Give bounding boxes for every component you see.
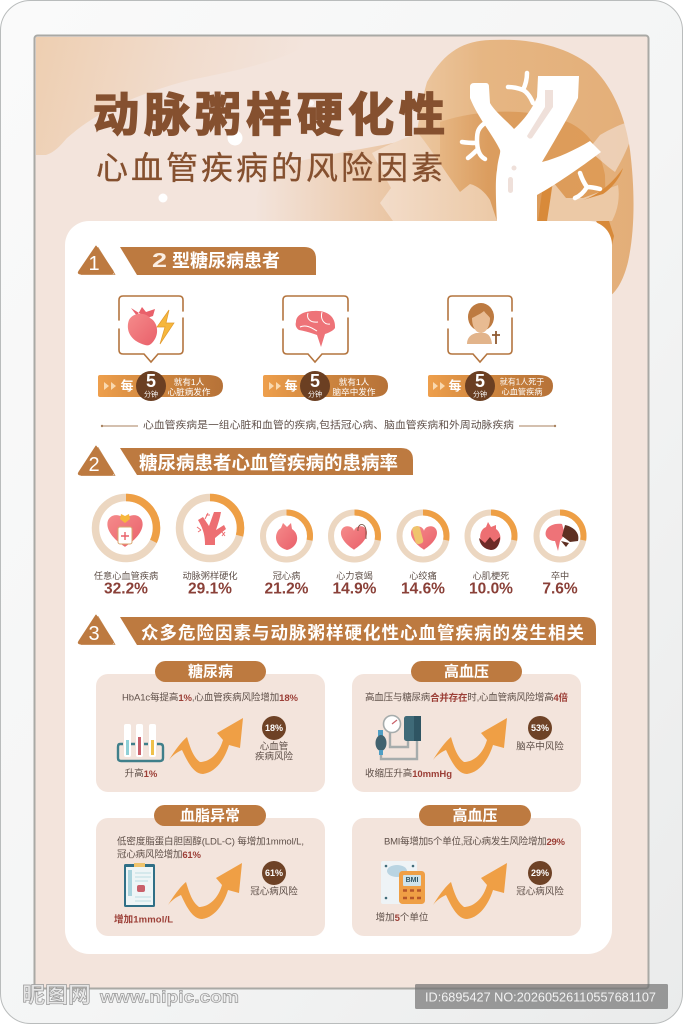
icon: heart bbox=[276, 523, 297, 550]
text: combined risk statement: 高血压与糖尿病合并存在时,心血管病风险增高4倍 bbox=[365, 692, 568, 704]
watermark: site logo bbox=[22, 982, 239, 1008]
panel: dyslipidemia bbox=[96, 805, 325, 936]
label: rise 1%: 升高1% bbox=[125, 768, 158, 780]
title: 动脉粥样硬化性 bbox=[93, 89, 445, 141]
icon: brain bbox=[296, 311, 335, 347]
pill: heart attack every 5 minutes: 心脏病发作 bbox=[168, 386, 211, 397]
icon: artery bbox=[197, 512, 226, 545]
label: increase 1 mmol/L: 增加1mmol/L bbox=[114, 914, 173, 926]
donut: atherosclerosis 29.1% bbox=[180, 498, 240, 598]
donut: stroke 7.6%: 卒中 bbox=[551, 570, 569, 581]
pill: heart attack every 5 minutes bbox=[98, 371, 223, 401]
pill heading: hypertension bbox=[411, 661, 522, 682]
donut: stroke 7.6% bbox=[536, 512, 584, 598]
arrow bbox=[433, 718, 507, 774]
label: increase 5 units: 增加5个单位 bbox=[376, 912, 429, 924]
pill heading: diabetes bbox=[155, 661, 266, 682]
badge: 18%: 18% bbox=[265, 723, 283, 733]
donut: any CVD 32.2% bbox=[94, 498, 158, 598]
label: stroke risk: 脑卒中风险 bbox=[516, 740, 564, 752]
donut: myocardial infarction 10.0%: 10.0% bbox=[469, 580, 513, 598]
pill: heart attack every 5 minutes: 5 bbox=[146, 371, 156, 391]
pill: death every 5 minutes: 5 bbox=[475, 371, 485, 391]
text: HbA1c statement: HbA1c每提高1%,心血管疾病风险增加18% bbox=[122, 692, 299, 704]
arrow bbox=[169, 718, 243, 774]
pill: stroke every 5 minutes: 脑卒中发作 bbox=[333, 386, 376, 397]
section 3 heading bbox=[78, 615, 596, 645]
pill: heart attack every 5 minutes: 每 bbox=[120, 378, 134, 394]
donut: angina 14.6% bbox=[400, 512, 446, 598]
decorative background shapes bbox=[36, 37, 637, 296]
panel: hypertension bbox=[352, 661, 581, 792]
label: systolic rise: 收缩压升高10mmHg bbox=[365, 768, 452, 780]
pill: stroke every 5 minutes: 每 bbox=[284, 378, 298, 394]
icon: clipboard bbox=[124, 863, 155, 907]
watermark: image ID bar: ID:6895427 NO:20260526110557681107 bbox=[425, 990, 656, 1004]
pill heading: hypertension: 高血压 bbox=[444, 662, 489, 680]
pill: death every 5 minutes: 心血管疾病 bbox=[502, 386, 542, 396]
watermark: image ID bar bbox=[415, 984, 668, 1009]
subtitle: 心血管疾病的风险因素 bbox=[96, 150, 443, 186]
section 2 heading bbox=[78, 446, 413, 476]
callout: heart attack bbox=[119, 296, 183, 362]
icon: damaged brain bbox=[546, 524, 578, 551]
arrow bbox=[433, 863, 507, 919]
donut: heart failure 14.9%: 14.9% bbox=[333, 580, 377, 598]
text: BMI statement: BMI每增加5个单位,冠心病发生风险增加29% bbox=[384, 836, 566, 848]
pill: death every 5 minutes: 分钟 bbox=[473, 390, 487, 398]
pill: heart attack every 5 minutes: 分钟 bbox=[144, 390, 158, 398]
icon: BMI calculator bbox=[381, 861, 425, 904]
text: LDL-C statement bbox=[117, 836, 304, 860]
badge: 18% bbox=[262, 716, 286, 740]
donut: myocardial infarction 10.0%: 心肌梗死 bbox=[473, 570, 509, 581]
donut: coronary heart disease 21.2%: 冠心病 bbox=[273, 570, 300, 581]
label: CHD risk: 冠心病风险 bbox=[250, 886, 298, 898]
panel: diabetes bbox=[96, 661, 325, 792]
donut: heart failure 14.9% bbox=[331, 512, 378, 598]
pill heading: BMI panel: 高血压 bbox=[452, 806, 498, 824]
section 1 heading bbox=[78, 246, 316, 275]
pill heading: diabetes: 糖尿病 bbox=[188, 662, 233, 680]
section 3 heading: 3 bbox=[88, 623, 100, 645]
badge: 61%: 61% bbox=[265, 868, 283, 878]
icon: BMI calculator: BMI bbox=[406, 877, 418, 884]
label: CVD risk: 疾病风险 bbox=[255, 750, 293, 762]
pill heading: dyslipidemia: 血脂异常 bbox=[180, 806, 240, 824]
callout: death bbox=[448, 296, 512, 362]
donut: stroke 7.6%: 7.6% bbox=[542, 580, 578, 598]
definition text line: 心血管疾病是一组心脏和血管的疾病,包括冠心病、脑血管疾病和外周动脉疾病 bbox=[143, 418, 514, 432]
icon: infarcted heart bbox=[479, 522, 500, 550]
section 2 heading: 2 bbox=[88, 454, 100, 476]
text: LDL-C statement: 低密度脂蛋白胆固醇(LDL-C) 每增加1mmol/L, bbox=[117, 836, 304, 848]
white content card bbox=[65, 221, 612, 954]
pill: stroke every 5 minutes: 5 bbox=[310, 371, 320, 391]
label: CVD risk: 心血管 bbox=[260, 740, 288, 752]
donut: heart failure 14.9%: 心力衰竭 bbox=[336, 570, 373, 581]
panel: BMI bbox=[352, 805, 581, 936]
donut: myocardial infarction 10.0% bbox=[468, 512, 514, 598]
pill: stroke every 5 minutes: 就有1人 bbox=[339, 376, 370, 387]
arrow bbox=[168, 863, 242, 919]
pill: stroke every 5 minutes bbox=[263, 371, 388, 401]
badge: 29%: 29% bbox=[531, 868, 549, 878]
badge: 61% bbox=[262, 861, 286, 885]
badge: 53%: 53% bbox=[531, 723, 549, 733]
icon: heart with bandage bbox=[411, 525, 437, 550]
pill heading: BMI panel bbox=[419, 805, 531, 826]
donut: any CVD 32.2%: 任意心血管疾病 bbox=[94, 570, 158, 581]
label: CVD risk bbox=[255, 740, 293, 762]
icon: artery tree bbox=[462, 73, 601, 222]
icon: blood pressure monitor bbox=[376, 716, 421, 759]
pill heading: dyslipidemia bbox=[154, 805, 266, 826]
donut: atherosclerosis 29.1%: 动脉粥样硬化 bbox=[182, 570, 238, 581]
icon: heart with wire bbox=[341, 524, 367, 550]
pill: stroke every 5 minutes: 分钟 bbox=[308, 390, 322, 398]
section 1 heading: 型糖尿病患者 bbox=[172, 250, 280, 271]
watermark: site logo: 昵图网 bbox=[22, 982, 91, 1008]
donut: coronary heart disease 21.2%: 21.2% bbox=[265, 580, 309, 598]
donut: angina 14.6%: 心绞痛 bbox=[409, 570, 437, 581]
donut: angina 14.6%: 14.6% bbox=[401, 580, 445, 598]
donut: atherosclerosis 29.1%: 29.1% bbox=[188, 580, 232, 598]
pill: death every 5 minutes bbox=[428, 371, 553, 401]
section 1 heading: 1 bbox=[88, 253, 100, 275]
donut: coronary heart disease 21.2% bbox=[263, 512, 310, 598]
label: CHD risk: 冠心病风险 bbox=[516, 886, 564, 898]
pill: death every 5 minutes: 就有1人死于 bbox=[500, 376, 544, 386]
pill: heart attack every 5 minutes: 就有1人 bbox=[174, 376, 205, 387]
section 3 heading: 众多危险因素与动脉粥样硬化性心血管疾病的发生相关 bbox=[141, 623, 584, 643]
watermark: site logo: www.nipic.com bbox=[99, 988, 239, 1006]
section 1 heading: 2 bbox=[152, 250, 167, 272]
pill: death every 5 minutes: 每 bbox=[448, 378, 462, 394]
icon: person with cross bbox=[467, 303, 500, 344]
callout: stroke bbox=[283, 296, 348, 362]
text: LDL-C statement: 冠心病风险增加61% bbox=[117, 848, 202, 860]
badge: 53% bbox=[528, 716, 552, 740]
section 2 heading: 糖尿病患者心血管疾病的患病率 bbox=[139, 452, 398, 474]
icon: heart with lightning bbox=[128, 307, 174, 345]
icon: test tubes bbox=[118, 724, 163, 761]
donut: any CVD 32.2%: 32.2% bbox=[104, 580, 148, 598]
icon: heart with medicine bbox=[107, 514, 143, 547]
badge: 29% bbox=[528, 861, 552, 885]
